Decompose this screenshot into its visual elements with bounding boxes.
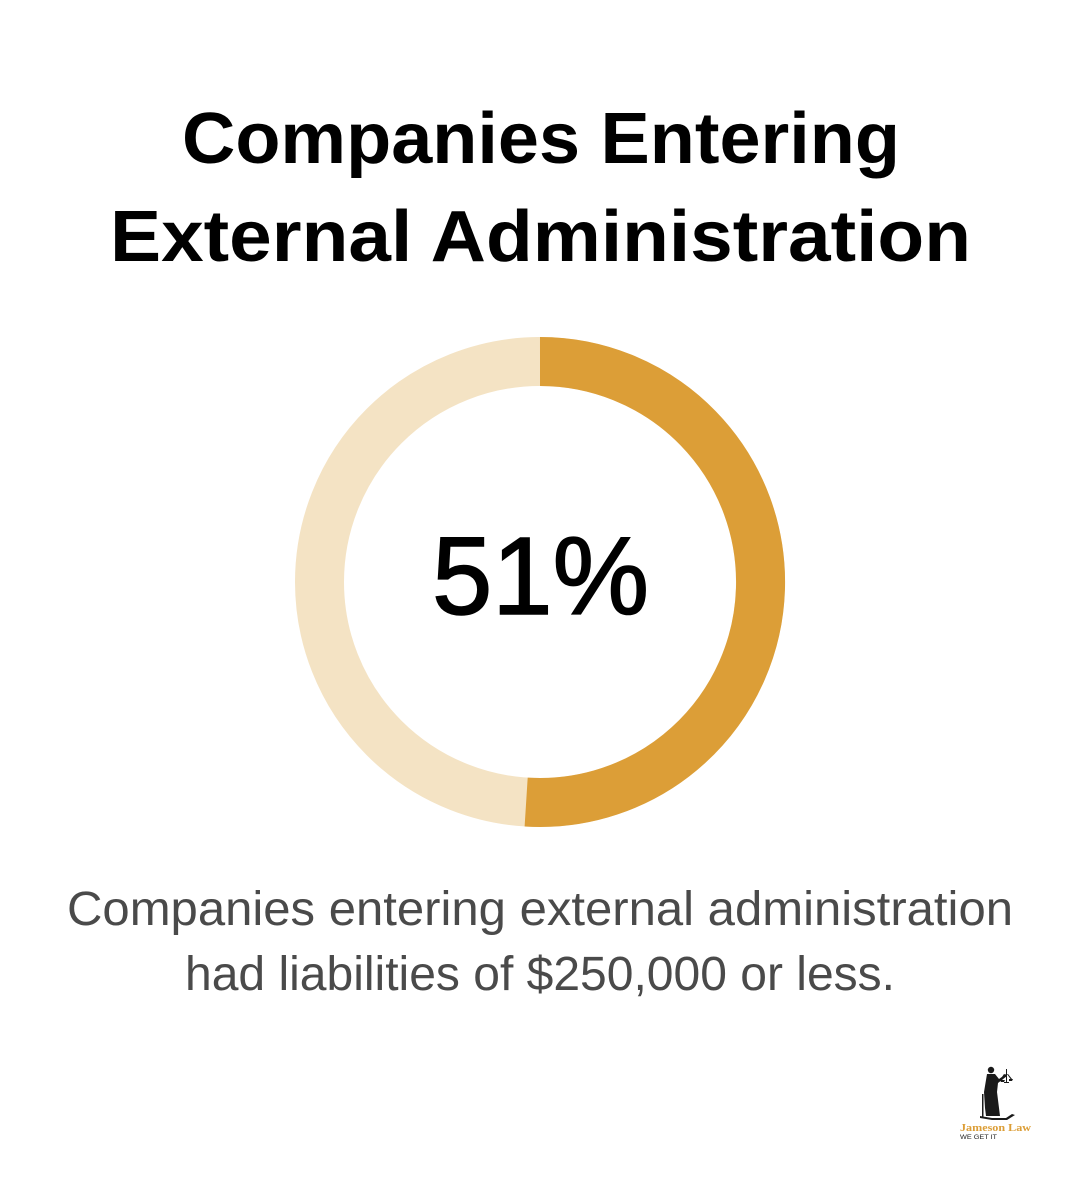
logo: Jameson Law xyxy=(960,1067,1031,1141)
donut track xyxy=(320,362,760,802)
title: Companies Entering xyxy=(182,99,900,179)
description xyxy=(67,883,1013,1001)
donut value: 51% xyxy=(526,361,761,802)
donut chart xyxy=(320,361,761,802)
description: had liabilities of $250,000 or less. xyxy=(185,948,895,1001)
logo tagline: WE GET IT xyxy=(960,1134,997,1141)
logo name: Jameson Law xyxy=(960,1123,1031,1134)
title: External Administration xyxy=(110,197,971,277)
value label: 51% xyxy=(432,515,649,638)
title xyxy=(110,99,971,277)
description: Companies entering external administration xyxy=(67,883,1013,936)
icon: lady justice xyxy=(980,1067,1015,1120)
